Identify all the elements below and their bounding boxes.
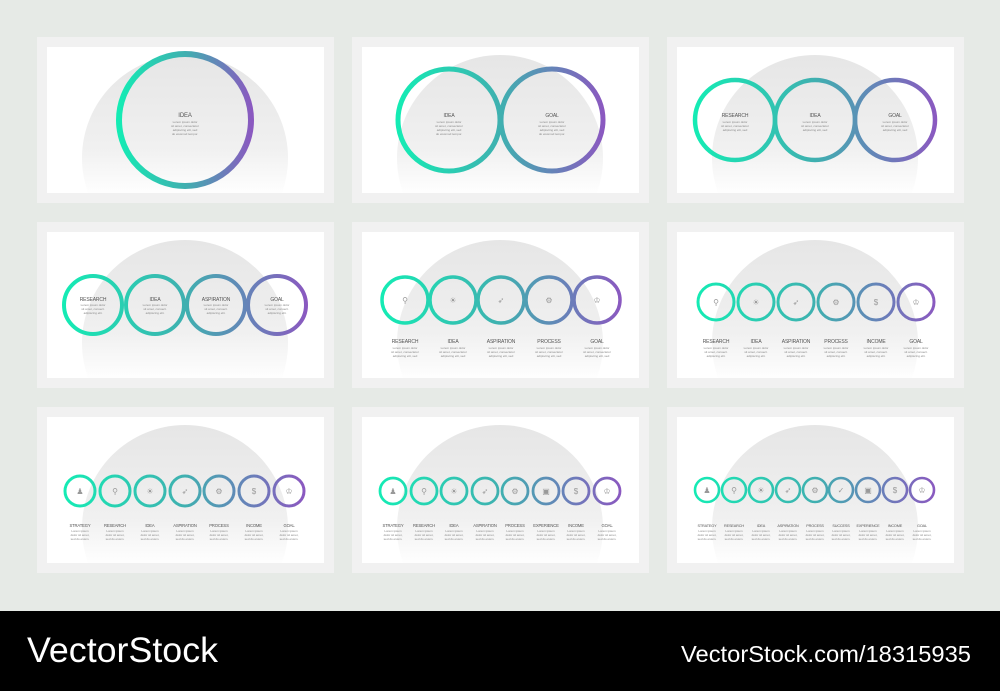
panel: eight circles: Lorem ipsum bbox=[415, 529, 433, 533]
label: idea bbox=[171, 113, 199, 136]
panel: seven circles: ⚲ bbox=[112, 487, 118, 496]
panel: eight circles: dolor sit amet, bbox=[415, 533, 434, 537]
panel: three circles: GOAL bbox=[888, 113, 902, 119]
panel: seven circles: Lorem ipsum bbox=[176, 529, 194, 533]
panel: eight circles: sed do eiusm. bbox=[567, 537, 585, 541]
panel: nine circles: dolor sit amet, bbox=[698, 533, 717, 537]
panel: four circles: Lorem ipsum dolor bbox=[81, 303, 105, 307]
panel: nine circles: IDEA bbox=[757, 524, 766, 528]
panel: nine circles: INCOME bbox=[888, 524, 903, 528]
panel: five circles: adipiscing elit, sed bbox=[393, 354, 418, 358]
label: idea: Lorem ipsum dolor bbox=[173, 120, 197, 124]
panel: seven circles: Lorem ipsum bbox=[71, 529, 89, 533]
panel: six circles: adipiscing elit. bbox=[827, 354, 846, 358]
panel: eight circles: Lorem ipsum bbox=[598, 529, 616, 533]
panel: seven circles: ⚙ bbox=[215, 487, 223, 496]
panel: five circles: ☀ bbox=[449, 296, 457, 305]
panel: six circles: Lorem ipsum dolor bbox=[784, 346, 808, 350]
label: idea: sit amet, consectetur bbox=[171, 124, 199, 128]
panel: seven circles: dolor sit amet, bbox=[106, 533, 125, 537]
panel: six circles: ⚙ bbox=[832, 298, 840, 307]
panel: seven circles: Lorem ipsum bbox=[280, 529, 298, 533]
panel: four circles: RESEARCH bbox=[80, 297, 107, 303]
panel: four circles: IDEA bbox=[149, 297, 161, 303]
panel: nine circles: Lorem ipsum bbox=[779, 529, 797, 533]
panel: nine circles: sed do eiusm. bbox=[859, 537, 877, 541]
panel: five circles: PROCESS bbox=[537, 339, 562, 345]
panel: eight circles: dolor sit amet, bbox=[506, 533, 525, 537]
panel: seven circles: sed do eiusm. bbox=[141, 537, 159, 541]
panel: six circles bbox=[667, 222, 964, 388]
panel: four circles: adipiscing elit. bbox=[268, 311, 287, 315]
panel: seven circles: ➶ bbox=[182, 487, 188, 496]
panel: eight circles: Lorem ipsum bbox=[567, 529, 585, 533]
panel: seven circles: GOAL bbox=[283, 523, 295, 528]
panel: eight circles: RESEARCH bbox=[413, 523, 435, 528]
footer logo: VectorStock bbox=[27, 631, 219, 670]
panel: four circles: adipiscing elit. bbox=[84, 311, 103, 315]
panel: four circles: sit amet, consect. bbox=[265, 307, 289, 311]
panel: three circles: sit amet, consectetur bbox=[721, 124, 749, 128]
panel: four circles: GOAL bbox=[270, 297, 284, 303]
panel: five circles: ➶ bbox=[498, 296, 504, 305]
panel: six circles: ASPIRATION bbox=[782, 339, 811, 345]
panel: two circles: IDEA bbox=[443, 113, 455, 119]
panel: nine circles: ♟ bbox=[703, 486, 711, 495]
panel: eight circles bbox=[352, 407, 649, 573]
panel: eight circles: STRATEGY bbox=[382, 523, 404, 528]
panel: five circles: sit amet, consectetur bbox=[535, 350, 563, 354]
panel: nine circles: dolor sit amet, bbox=[886, 533, 905, 537]
panel: seven circles: Lorem ipsum bbox=[141, 529, 159, 533]
panel: eight circles: sed do eiusm. bbox=[384, 537, 402, 541]
panel: seven circles: sed do eiusm. bbox=[176, 537, 194, 541]
panel: three circles: adipiscing elit, sed bbox=[803, 128, 828, 132]
panel: nine circles: dolor sit amet, bbox=[779, 533, 798, 537]
panel: seven circles: dolor sit amet, bbox=[71, 533, 90, 537]
panel: eight circles: IDEA bbox=[449, 523, 459, 528]
panel: eight circles: ⚲ bbox=[421, 487, 427, 496]
panel: seven circles: PROCESS bbox=[209, 523, 229, 528]
panel: nine circles: sed do eiusm. bbox=[698, 537, 716, 541]
panel: eight circles: PROCESS bbox=[505, 523, 525, 528]
label: idea: IDEA bbox=[178, 113, 192, 119]
panel: five circles: IDEA bbox=[447, 339, 459, 345]
panel: seven circles: Lorem ipsum bbox=[106, 529, 124, 533]
panel: nine circles: Lorem ipsum bbox=[913, 529, 931, 533]
panel: six circles: adipiscing elit. bbox=[707, 354, 726, 358]
panel: six circles: sit amet, consect. bbox=[864, 350, 888, 354]
panel: two circles: sit amet, consectetur bbox=[538, 124, 566, 128]
panel: nine circles: ➶ bbox=[785, 486, 791, 495]
panel: eight circles: sed do eiusm. bbox=[598, 537, 616, 541]
panel: eight circles: sed do eiusm. bbox=[476, 537, 494, 541]
panel: two circles: sit amet, consectetur bbox=[435, 124, 463, 128]
panel: nine circles: sed do eiusm. bbox=[725, 537, 743, 541]
panel: nine circles: EXPERIENCE bbox=[857, 524, 880, 528]
panel: five circles: adipiscing elit, sed bbox=[489, 354, 514, 358]
panel: nine circles: dolor sit amet, bbox=[806, 533, 825, 537]
panel: two circles bbox=[352, 37, 649, 203]
panel: eight circles: ➶ bbox=[482, 487, 488, 496]
panel: six circles: IDEA bbox=[750, 339, 762, 345]
panel: eight circles: ASPIRATION bbox=[473, 523, 497, 528]
panel: four circles: Lorem ipsum dolor bbox=[143, 303, 167, 307]
panel: nine circles: Lorem ipsum bbox=[886, 529, 904, 533]
panel: single circle bbox=[37, 37, 334, 203]
panel: nine circles: dolor sit amet, bbox=[725, 533, 744, 537]
panel: eight circles: sed do eiusm. bbox=[537, 537, 555, 541]
panel: nine circles: ☀ bbox=[757, 486, 765, 495]
panel: six circles: Lorem ipsum dolor bbox=[824, 346, 848, 350]
panel: seven circles bbox=[37, 407, 334, 573]
panel: eight circles: sed do eiusm. bbox=[445, 537, 463, 541]
panel: nine circles: ASPIRATION bbox=[777, 524, 799, 528]
panel: two circles: adipiscing elit, sed bbox=[437, 128, 462, 132]
panel: six circles: ⚲ bbox=[713, 298, 719, 307]
panel: three circles: IDEA bbox=[809, 113, 821, 119]
panel: five circles: ♔ bbox=[593, 296, 601, 305]
panel: nine circles: ✓ bbox=[838, 486, 844, 495]
panel: seven circles: ASPIRATION bbox=[173, 523, 197, 528]
panel: eight circles: ♔ bbox=[603, 487, 611, 496]
panel: eight circles: ☀ bbox=[450, 487, 458, 496]
panel: four circles: Lorem ipsum dolor bbox=[204, 303, 228, 307]
panel: nine circles: dolor sit amet, bbox=[752, 533, 771, 537]
panel: three circles: sit amet, consectetur bbox=[801, 124, 829, 128]
panel: five circles: sit amet, consectetur bbox=[583, 350, 611, 354]
panel: eight circles: ⚙ bbox=[511, 487, 519, 496]
panel: three circles: RESEARCH bbox=[722, 113, 749, 119]
panel: six circles: sit amet, consect. bbox=[744, 350, 768, 354]
panel: five circles: adipiscing elit, sed bbox=[441, 354, 466, 358]
panel: four circles: adipiscing elit. bbox=[207, 311, 226, 315]
panel: eight circles: Lorem ipsum bbox=[445, 529, 463, 533]
panel: nine circles: Lorem ipsum bbox=[698, 529, 716, 533]
panel: three circles bbox=[667, 37, 964, 203]
panel: three circles: adipiscing elit, sed bbox=[723, 128, 748, 132]
panel: five circles: RESEARCH bbox=[392, 339, 419, 345]
panel: two circles: do eiusmod tempor. bbox=[539, 132, 565, 136]
panel: three circles: Lorem ipsum dolor bbox=[883, 120, 907, 124]
panel: six circles: $ bbox=[874, 298, 879, 307]
panel: nine circles: ⚙ bbox=[811, 486, 819, 495]
panel: nine circles: dolor sit amet, bbox=[859, 533, 878, 537]
ring: idea bbox=[119, 54, 251, 186]
panel: six circles: adipiscing elit. bbox=[787, 354, 806, 358]
panel: six circles: ➶ bbox=[793, 298, 799, 307]
panel: five circles: Lorem ipsum dolor bbox=[393, 346, 417, 350]
panel: five circles: Lorem ipsum dolor bbox=[441, 346, 465, 350]
panel: nine circles: sed do eiusm. bbox=[886, 537, 904, 541]
panel: seven circles: INCOME bbox=[246, 523, 262, 528]
panel: eight circles: Lorem ipsum bbox=[506, 529, 524, 533]
panel: nine circles: ⚲ bbox=[731, 486, 737, 495]
panel: eight circles: sed do eiusm. bbox=[506, 537, 524, 541]
panel: five circles: ⚲ bbox=[402, 296, 408, 305]
panel: five circles: GOAL bbox=[590, 339, 604, 345]
panel: nine circles: Lorem ipsum bbox=[832, 529, 850, 533]
panel: nine circles: SUCCESS bbox=[832, 524, 850, 528]
panel: five circles: ASPIRATION bbox=[487, 339, 516, 345]
panel: three circles: sit amet, consectetur bbox=[881, 124, 909, 128]
panel: eight circles: ▣ bbox=[542, 487, 550, 496]
panel: eight circles: dolor sit amet, bbox=[537, 533, 556, 537]
panel: seven circles: sed do eiusm. bbox=[245, 537, 263, 541]
footer url: VectorStock.com/18315935 bbox=[681, 641, 971, 667]
panel: six circles: sit amet, consect. bbox=[784, 350, 808, 354]
panel: two circles: Lorem ipsum dolor bbox=[437, 120, 461, 124]
panel: seven circles: $ bbox=[252, 487, 257, 496]
panel: seven circles: ☀ bbox=[146, 487, 154, 496]
panel: nine circles: Lorem ipsum bbox=[752, 529, 770, 533]
panel: six circles: RESEARCH bbox=[703, 339, 730, 345]
panel: six circles: GOAL bbox=[909, 339, 923, 345]
panel: eight circles: Lorem ipsum bbox=[537, 529, 555, 533]
panel: seven circles: dolor sit amet, bbox=[280, 533, 299, 537]
panel: eight circles: ♟ bbox=[389, 487, 397, 496]
panel: four circles: sit amet, consect. bbox=[81, 307, 105, 311]
panel: two circles: do eiusmod tempor. bbox=[436, 132, 462, 136]
panel: six circles: sit amet, consect. bbox=[904, 350, 928, 354]
panel: six circles: ♔ bbox=[912, 298, 920, 307]
panel: four circles bbox=[37, 222, 334, 388]
panel: nine circles: ▣ bbox=[864, 486, 872, 495]
panel: nine circles: dolor sit amet, bbox=[832, 533, 851, 537]
panel: seven circles: Lorem ipsum bbox=[210, 529, 228, 533]
panel: nine circles: Lorem ipsum bbox=[725, 529, 743, 533]
panel: five circles: ⚙ bbox=[545, 296, 553, 305]
panel: eight circles: INCOME bbox=[568, 523, 584, 528]
panel: six circles: adipiscing elit. bbox=[907, 354, 926, 358]
panel: seven circles: sed do eiusm. bbox=[210, 537, 228, 541]
panel: six circles: sit amet, consect. bbox=[704, 350, 728, 354]
panel: nine circles: Lorem ipsum bbox=[859, 529, 877, 533]
panel: five circles: sit amet, consectetur bbox=[439, 350, 467, 354]
panel: five circles bbox=[352, 222, 649, 388]
panel: six circles: ☀ bbox=[752, 298, 760, 307]
panel: six circles: adipiscing elit. bbox=[867, 354, 886, 358]
panel: four circles: Lorem ipsum dolor bbox=[265, 303, 289, 307]
panel: nine circles: STRATEGY bbox=[698, 524, 717, 528]
panel: five circles: adipiscing elit, sed bbox=[537, 354, 562, 358]
panel: nine circles: sed do eiusm. bbox=[913, 537, 931, 541]
panel: eight circles: $ bbox=[574, 487, 579, 496]
panel: four circles: sit amet, consect. bbox=[204, 307, 228, 311]
panel: six circles: Lorem ipsum dolor bbox=[904, 346, 928, 350]
panel: seven circles: dolor sit amet, bbox=[141, 533, 160, 537]
panel: six circles: PROCESS bbox=[824, 339, 849, 345]
panel: six circles: adipiscing elit. bbox=[747, 354, 766, 358]
panel: six circles: Lorem ipsum dolor bbox=[704, 346, 728, 350]
panel: nine circles bbox=[667, 407, 964, 573]
panel: four circles: ASPIRATION bbox=[202, 297, 231, 303]
panel: seven circles: IDEA bbox=[145, 523, 155, 528]
label: idea: do eiusmod tempor. bbox=[172, 132, 198, 136]
panel: two circles: GOAL bbox=[545, 113, 559, 119]
panel: five circles: sit amet, consectetur bbox=[391, 350, 419, 354]
panel: six circles: Lorem ipsum dolor bbox=[744, 346, 768, 350]
panel: nine circles: RESEARCH bbox=[724, 524, 744, 528]
panel: three circles: Lorem ipsum dolor bbox=[803, 120, 827, 124]
panel: eight circles: Lorem ipsum bbox=[476, 529, 494, 533]
panel: nine circles: $ bbox=[893, 486, 898, 495]
panel: seven circles: sed do eiusm. bbox=[280, 537, 298, 541]
panel: seven circles: ♔ bbox=[285, 487, 293, 496]
panel: nine circles: sed do eiusm. bbox=[806, 537, 824, 541]
panel: seven circles: ♟ bbox=[76, 487, 84, 496]
panel: eight circles: Lorem ipsum bbox=[384, 529, 402, 533]
panel: five circles: Lorem ipsum dolor bbox=[489, 346, 513, 350]
panel: nine circles: sed do eiusm. bbox=[832, 537, 850, 541]
panel: seven circles: dolor sit amet, bbox=[210, 533, 229, 537]
panel: six circles: sit amet, consect. bbox=[824, 350, 848, 354]
panel: seven circles: STRATEGY bbox=[69, 523, 91, 528]
panel: seven circles: Lorem ipsum bbox=[245, 529, 263, 533]
panel: five circles: Lorem ipsum dolor bbox=[585, 346, 609, 350]
panel: nine circles: dolor sit amet, bbox=[913, 533, 932, 537]
panel: eight circles: dolor sit amet, bbox=[445, 533, 464, 537]
panel: five circles: sit amet, consectetur bbox=[487, 350, 515, 354]
panel: eight circles: dolor sit amet, bbox=[567, 533, 586, 537]
panel: five circles: adipiscing elit, sed bbox=[585, 354, 610, 358]
panel: six circles: INCOME bbox=[866, 339, 886, 345]
panel: nine circles: ♔ bbox=[918, 486, 926, 495]
panel: nine circles: sed do eiusm. bbox=[752, 537, 770, 541]
panel: seven circles: sed do eiusm. bbox=[71, 537, 89, 541]
panel: four circles: adipiscing elit. bbox=[146, 311, 165, 315]
panel: eight circles: sed do eiusm. bbox=[415, 537, 433, 541]
panel: seven circles: sed do eiusm. bbox=[106, 537, 124, 541]
panel: eight circles: dolor sit amet, bbox=[598, 533, 617, 537]
label: idea: adipiscing elit, sed bbox=[173, 128, 198, 132]
panel: nine circles: GOAL bbox=[917, 524, 927, 528]
panel: seven circles: dolor sit amet, bbox=[245, 533, 264, 537]
panel: two circles: Lorem ipsum dolor bbox=[540, 120, 564, 124]
panel: eight circles: dolor sit amet, bbox=[476, 533, 495, 537]
panel: four circles: sit amet, consect. bbox=[143, 307, 167, 311]
panel: five circles: Lorem ipsum dolor bbox=[537, 346, 561, 350]
panel: eight circles: EXPERIENCE bbox=[533, 523, 559, 528]
panel: three circles: Lorem ipsum dolor bbox=[723, 120, 747, 124]
panel: seven circles: RESEARCH bbox=[104, 523, 126, 528]
panel: two circles: adipiscing elit, sed bbox=[540, 128, 565, 132]
panel: three circles: adipiscing elit, sed bbox=[883, 128, 908, 132]
panel: nine circles: Lorem ipsum bbox=[806, 529, 824, 533]
panel: eight circles: dolor sit amet, bbox=[384, 533, 403, 537]
panel: eight circles: GOAL bbox=[601, 523, 613, 528]
panel: nine circles: sed do eiusm. bbox=[779, 537, 797, 541]
panel: nine circles: PROCESS bbox=[806, 524, 824, 528]
panel: six circles: Lorem ipsum dolor bbox=[864, 346, 888, 350]
footer bar bbox=[0, 611, 1000, 691]
panel: seven circles: dolor sit amet, bbox=[176, 533, 195, 537]
